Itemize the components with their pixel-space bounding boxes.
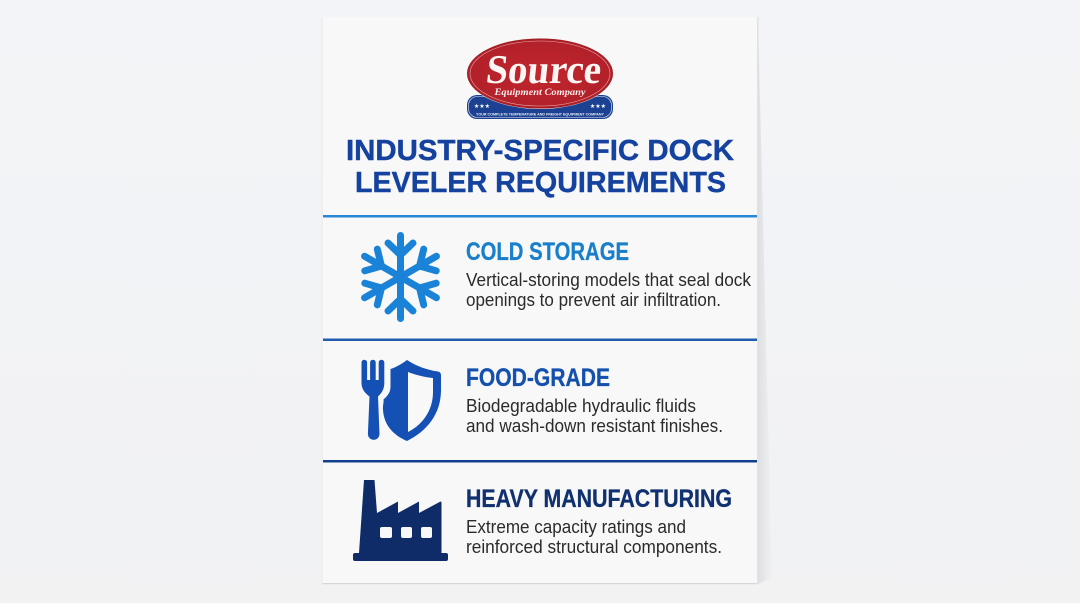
description: cold storage xyxy=(466,269,752,310)
logo: Source Equipment Company: Source xyxy=(484,46,604,92)
description: heavy manufacturing: Extreme capacity ratings and xyxy=(466,516,686,537)
description: cold storage: openings to prevent air infiltration. xyxy=(466,289,721,310)
title xyxy=(346,135,734,199)
logo: Source Equipment Company: ★★★ xyxy=(590,103,606,110)
logo: Source Equipment Company: ★★★ xyxy=(474,103,490,110)
icon: shield xyxy=(383,360,441,441)
icon: fork xyxy=(362,360,384,440)
divider lines xyxy=(323,215,757,462)
description: food-grade xyxy=(466,395,723,436)
panel: heavy manufacturing xyxy=(353,480,732,561)
panel: sign board xyxy=(322,17,758,584)
logo: Source Equipment Company: YOUR COMPLETE TEMPERATURE AND FREIGHT EQUIPMENT COMPANY xyxy=(476,112,604,116)
icon: snowflake xyxy=(358,236,443,318)
logo: Source Equipment Company xyxy=(466,38,614,119)
logo: Source Equipment Company: Equipment Company xyxy=(493,88,586,98)
panel: cold storage xyxy=(358,236,752,318)
description: heavy manufacturing: reinforced structural components. xyxy=(466,536,722,557)
description: food-grade: and wash-down resistant finishes. xyxy=(466,415,723,436)
icon: factory xyxy=(353,480,448,561)
description: cold storage: Vertical-storing models that seal dock xyxy=(466,269,752,290)
heading: heavy manufacturing: HEAVY MANUFACTURING xyxy=(466,485,732,513)
heading: cold storage: COLD STORAGE xyxy=(466,238,629,266)
title: INDUSTRY-SPECIFIC DOCK xyxy=(346,135,734,167)
panel: food-grade xyxy=(362,360,723,441)
heading: food-grade: FOOD-GRADE xyxy=(466,364,610,392)
description: heavy manufacturing xyxy=(466,516,722,557)
title: LEVELER REQUIREMENTS xyxy=(355,167,726,199)
description: food-grade: Biodegradable hydraulic fluids xyxy=(466,395,696,416)
